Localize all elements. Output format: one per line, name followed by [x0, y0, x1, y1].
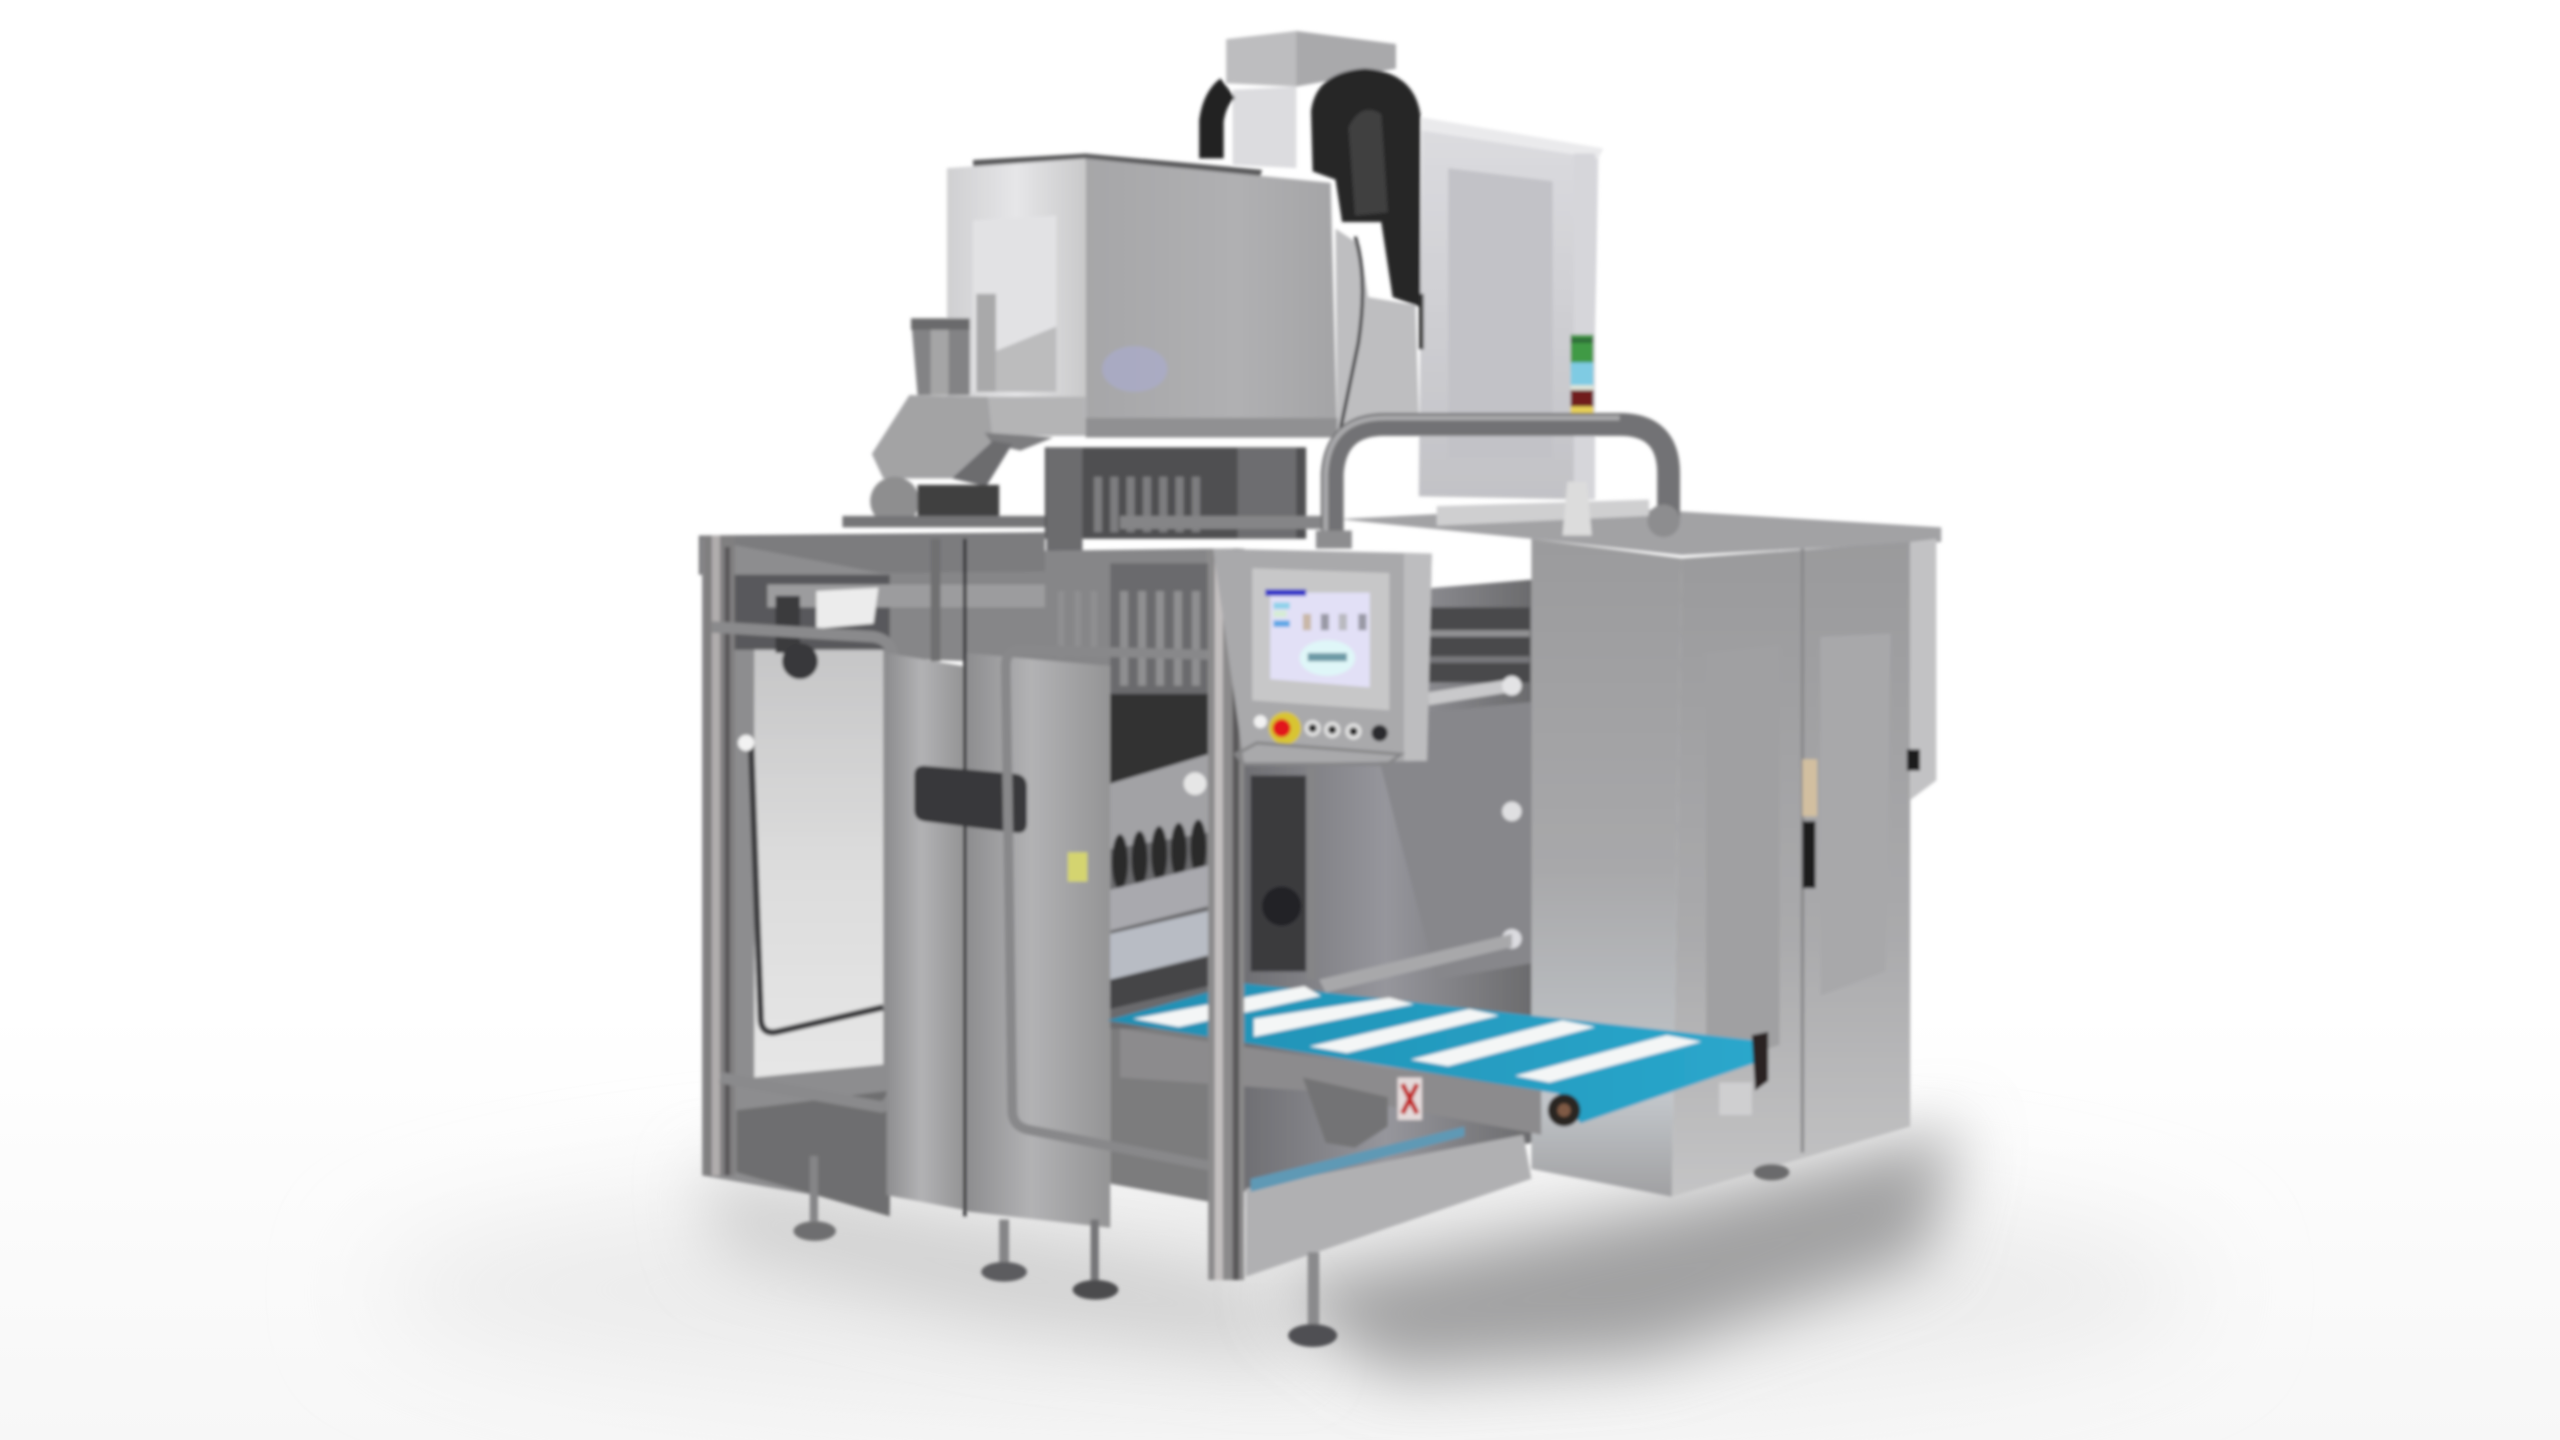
push buttons — [1304, 720, 1388, 741]
stack light — [1571, 335, 1593, 416]
side frame — [1120, 1029, 1541, 1135]
pack strips — [1133, 986, 1701, 1082]
product bottle — [911, 318, 970, 395]
power socket — [1907, 749, 1920, 771]
centre door panels — [887, 539, 1110, 1228]
frame backdrop — [731, 549, 1208, 669]
left guard frame — [702, 536, 1045, 1216]
centre door pipework — [1006, 650, 1210, 1166]
machine — [699, 31, 1941, 1347]
hopper housing — [947, 153, 1419, 438]
back electrical cabinet — [1419, 118, 1603, 500]
guard pipework — [712, 627, 893, 1107]
floor background — [0, 1012, 2560, 1440]
front post — [1208, 549, 1244, 1280]
feeder chute — [842, 395, 1055, 527]
yellow warning label — [1068, 852, 1087, 882]
screen display — [1265, 589, 1370, 687]
tubular handle bar — [1316, 418, 1680, 549]
black handle pad — [914, 766, 1027, 833]
red safety label — [1398, 1078, 1422, 1120]
floor shadow — [376, 1127, 2204, 1412]
cabinet foot — [1753, 1164, 1789, 1180]
door warning label — [1802, 759, 1817, 816]
mechanism interior — [1058, 563, 1316, 1029]
opening interior — [1241, 580, 1531, 1192]
deck top — [699, 482, 1941, 575]
tower column — [1226, 31, 1396, 168]
front roller — [1548, 1094, 1580, 1127]
blue belt — [1107, 983, 1760, 1123]
adjustable feet — [793, 1156, 1337, 1347]
lower front skirt — [1110, 996, 1531, 1277]
door handle — [1802, 821, 1816, 888]
sealing head column — [1045, 447, 1340, 627]
conveyor — [1107, 983, 1768, 1148]
cabinet door windows — [1706, 633, 1891, 1069]
emergency stop — [1254, 712, 1301, 744]
belt end bracket — [1752, 1032, 1768, 1091]
gearbox disc — [1303, 1078, 1388, 1148]
operator control panel — [1213, 549, 1432, 764]
touch screen bezel — [1252, 568, 1389, 710]
cable chain — [1211, 69, 1420, 307]
right cabinet — [1531, 539, 1936, 1197]
